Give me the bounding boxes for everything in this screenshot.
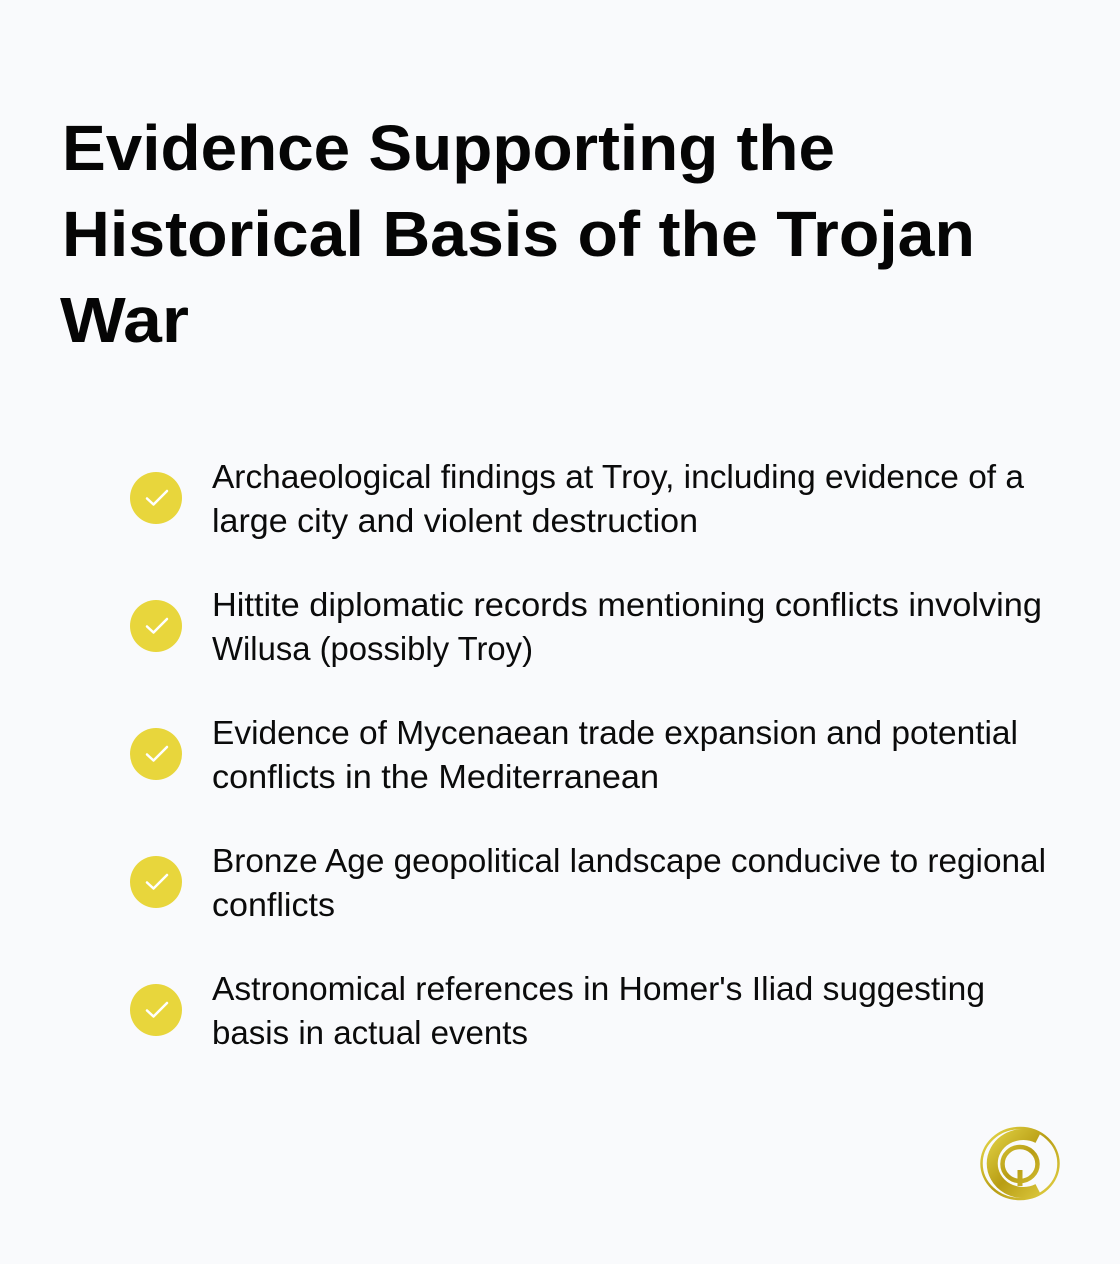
item 5: astronomical references: basis in actual events bbox=[212, 1014, 528, 1051]
item 4: Bronze Age landscape bbox=[130, 842, 1046, 923]
item 2: Hittite records bbox=[130, 586, 1042, 667]
logo: gold CQ emblem bbox=[982, 1128, 1058, 1199]
item 2: Hittite records: Hittite diplomatic records mentioning conflicts involving bbox=[212, 586, 1042, 623]
item 1: archaeological findings bbox=[130, 458, 1025, 539]
item 3: Mycenaean trade: conflicts in the Mediterranean bbox=[212, 758, 659, 795]
evidence list bbox=[130, 458, 1046, 1051]
item 3: Mycenaean trade bbox=[130, 714, 1018, 795]
item 5: astronomical references: Astronomical references in Homer's Iliad suggesting bbox=[212, 970, 985, 1007]
item 4: Bronze Age landscape: conflicts bbox=[212, 886, 335, 923]
item 1: archaeological findings: Archaeological findings at Troy, including evidence of a bbox=[212, 458, 1025, 495]
title: War bbox=[60, 284, 189, 356]
item 3: Mycenaean trade: Evidence of Mycenaean trade expansion and potential bbox=[212, 714, 1018, 751]
item 4: Bronze Age landscape: Bronze Age geopolitical landscape conducive to regional bbox=[212, 842, 1046, 879]
title: Evidence Supporting the bbox=[62, 112, 835, 184]
item 2: Hittite records: Wilusa (possibly Troy) bbox=[212, 630, 533, 667]
item 5: astronomical references bbox=[130, 970, 985, 1051]
item 1: archaeological findings: large city and violent destruction bbox=[212, 502, 698, 539]
title: Historical Basis of the Trojan bbox=[62, 198, 975, 270]
title bbox=[60, 112, 975, 356]
